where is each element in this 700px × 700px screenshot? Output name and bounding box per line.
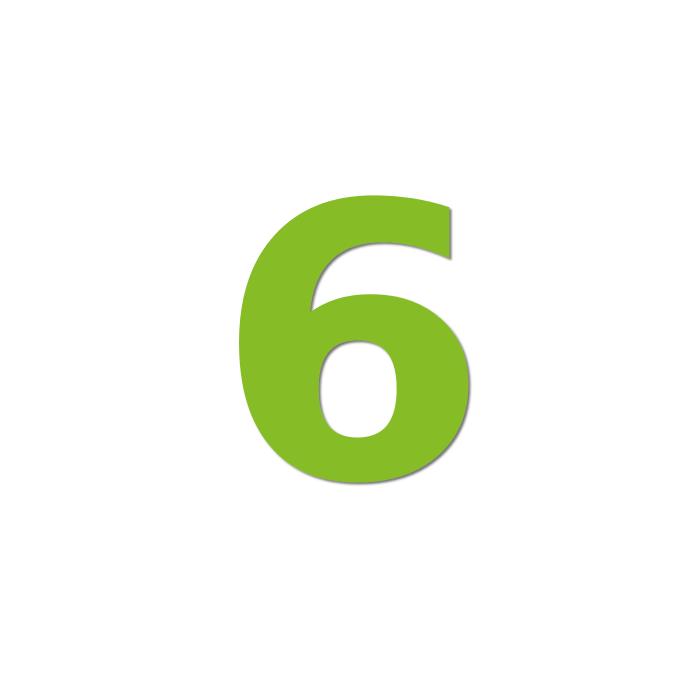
numeral six: 6 — [215, 125, 489, 567]
